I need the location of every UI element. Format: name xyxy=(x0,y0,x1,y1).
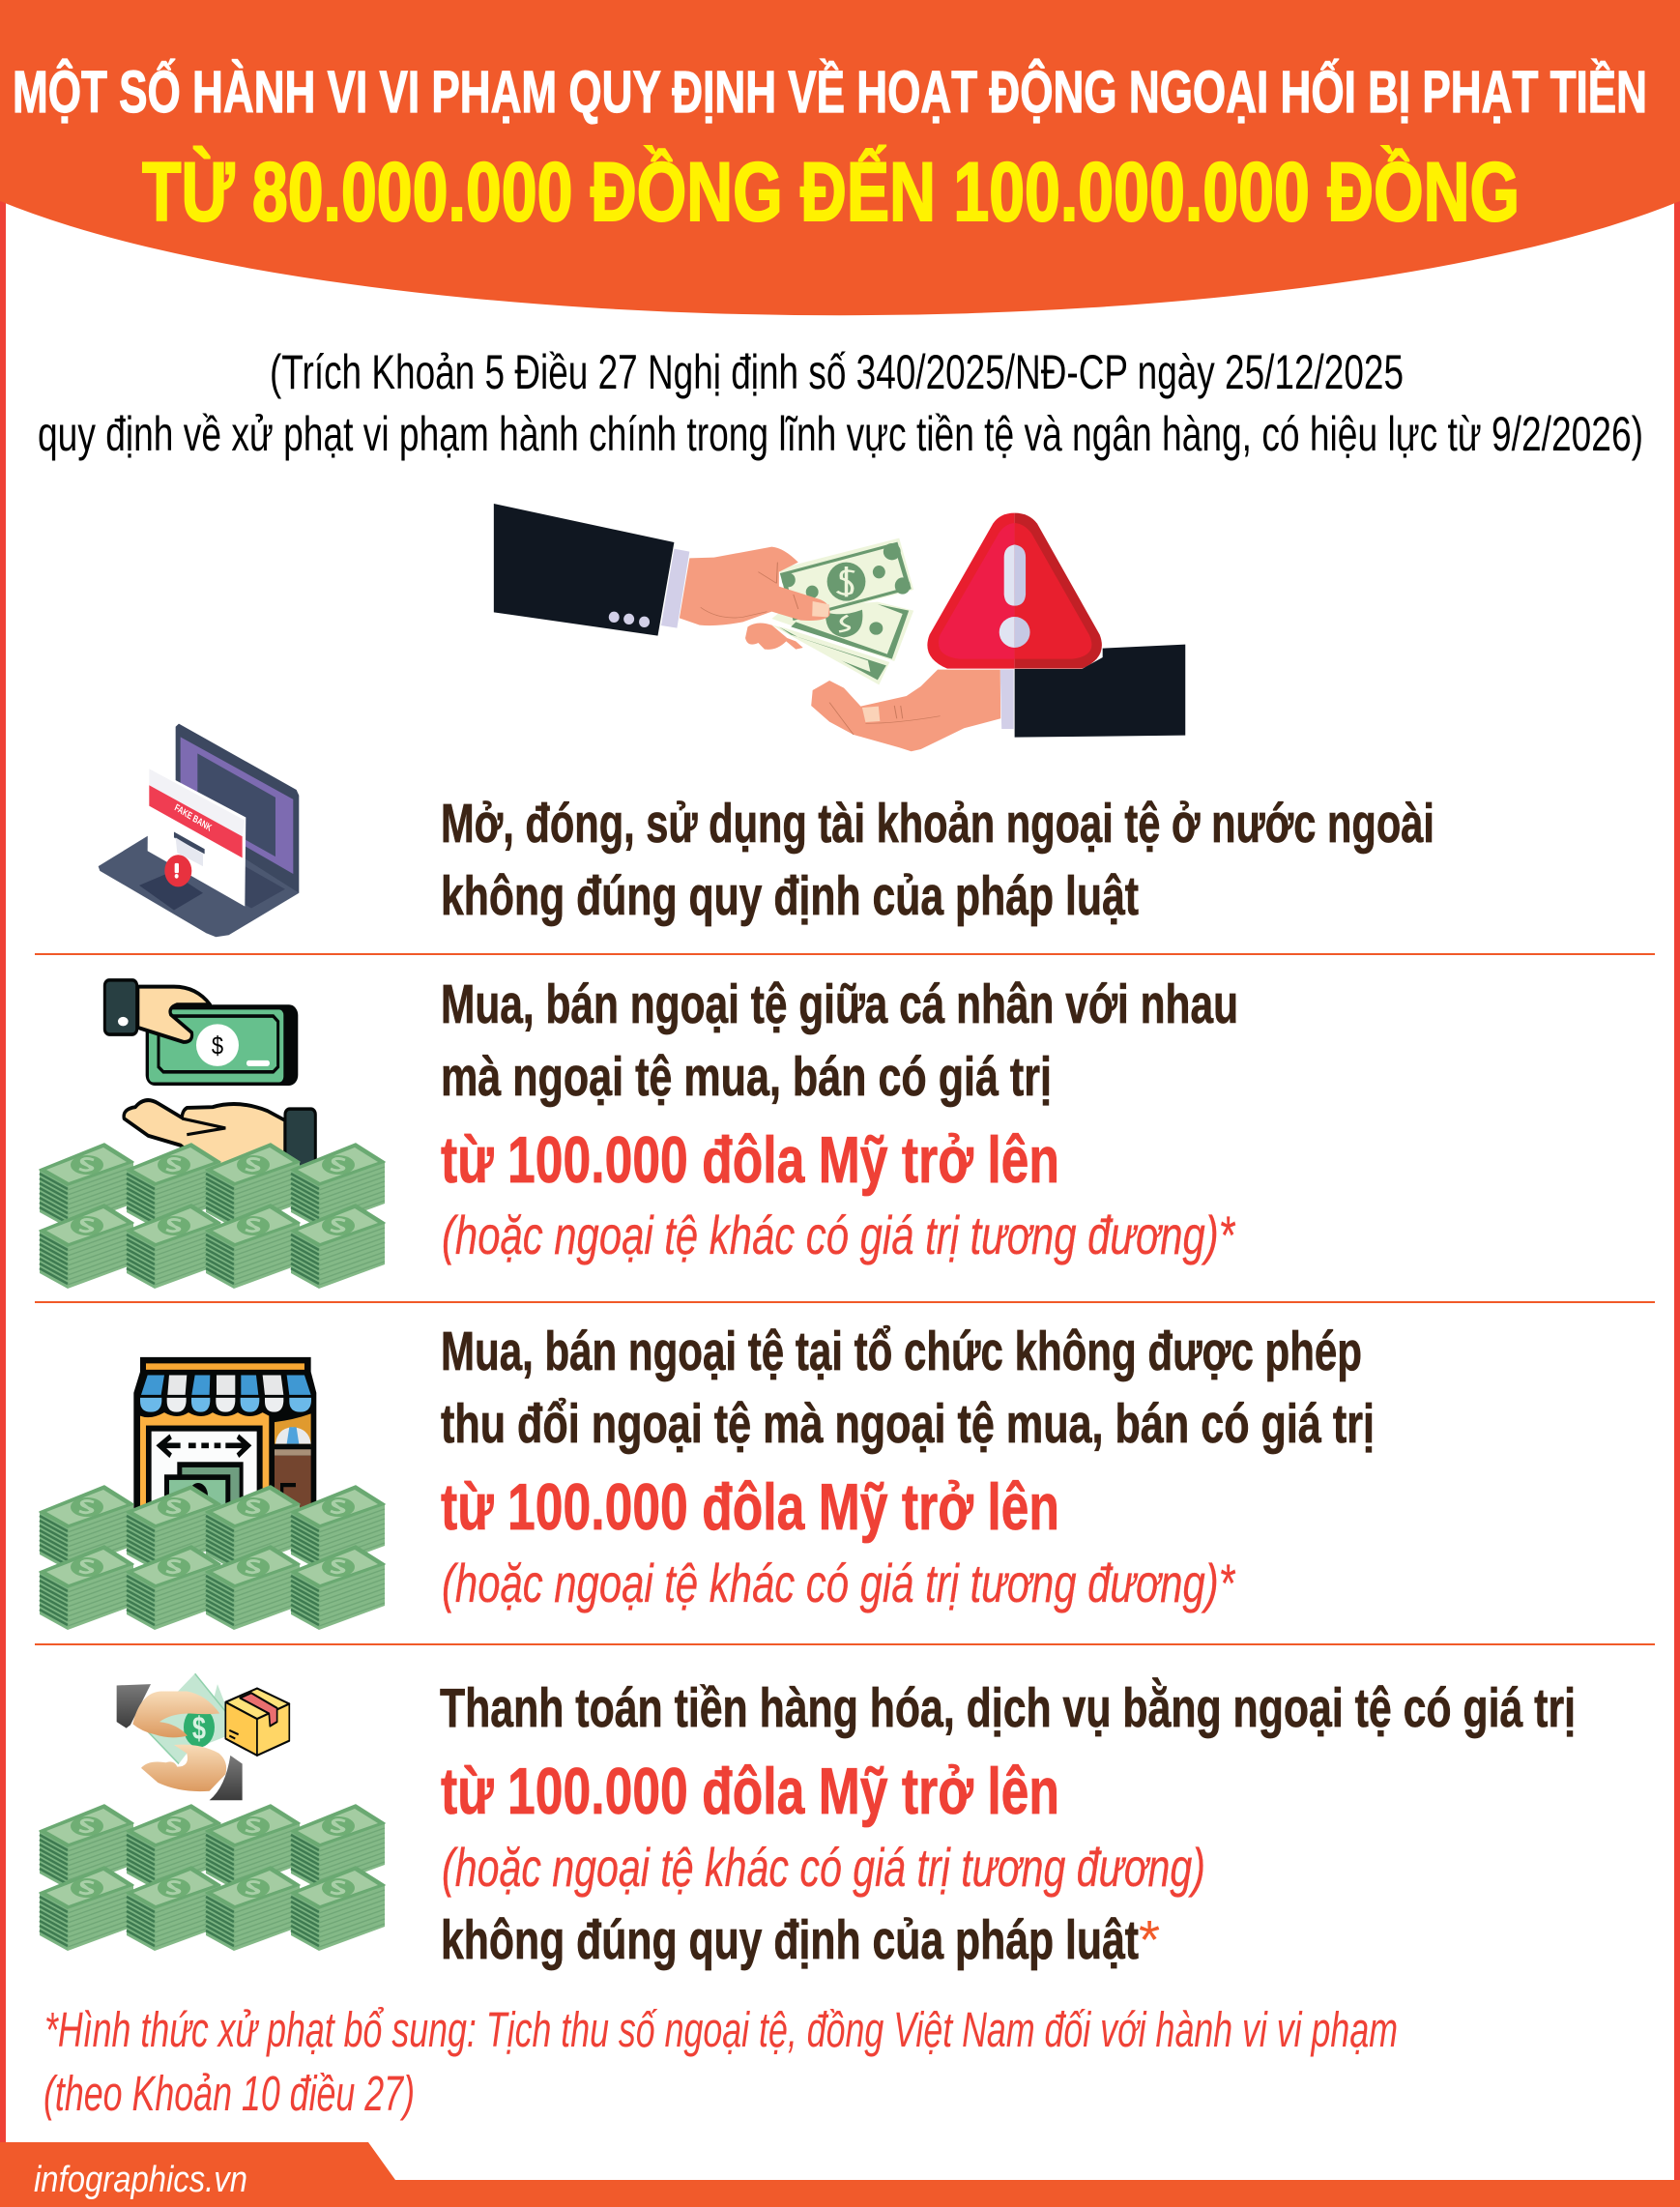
item 2 text: từ 100.000 đôla Mỹ trở lên xyxy=(441,1123,1059,1197)
icon: laptop with fake bank page: FAKE BANK xyxy=(173,802,214,834)
subtitle: legal source xyxy=(38,345,1643,461)
item 4 text: (hoặc ngoại tệ khác có giá trị tương đương) xyxy=(442,1837,1205,1898)
right sleeve xyxy=(1000,645,1185,738)
left hand xyxy=(680,547,830,650)
icon: exchange shop xyxy=(133,1357,316,1514)
item 2 text: Mua, bán ngoại tệ giữa cá nhân với nhau xyxy=(441,973,1238,1035)
item 3 text: (hoặc ngoại tệ khác có giá trị tương đương)* xyxy=(442,1553,1236,1613)
icon: hands exchanging cash with parcel xyxy=(117,1673,289,1800)
item 1 text xyxy=(441,793,1434,927)
item 4 text xyxy=(440,1676,1576,1971)
right hand xyxy=(811,670,1000,751)
item 4 text: không đúng quy định của pháp luật xyxy=(441,1909,1139,1971)
lower hand xyxy=(124,1100,315,1172)
footnote: (theo Khoản 10 điều 27) xyxy=(43,2066,415,2121)
icon: hands passing a banknote xyxy=(104,980,315,1172)
lower sleeve and hand xyxy=(141,1745,243,1800)
icon: money stacks xyxy=(40,1486,385,1630)
item 3 text: Mua, bán ngoại tệ tại tổ chức không được phép xyxy=(441,1321,1362,1382)
double arrow xyxy=(159,1437,248,1456)
footnote xyxy=(43,2002,1398,2121)
notes: $ xyxy=(192,1711,206,1747)
item 2 text: (hoặc ngoại tệ khác có giá trị tương đương)* xyxy=(442,1205,1236,1265)
illustration: hands exchanging money with warning sign xyxy=(494,504,1185,751)
item 1 text: không đúng quy định của pháp luật xyxy=(441,865,1139,927)
upper hand xyxy=(104,980,210,1042)
divider xyxy=(35,1643,1655,1645)
banknote: $ xyxy=(212,1032,224,1060)
awning xyxy=(140,1376,311,1412)
item 3 text: thu đổi ngoại tệ mà ngoại tệ mua, bán có giá trị xyxy=(441,1393,1375,1455)
banknote xyxy=(146,1004,298,1086)
icon: laptop with fake bank page xyxy=(99,724,299,937)
item 3 text xyxy=(441,1321,1375,1613)
icon: money stacks xyxy=(40,1805,385,1951)
item 4 text: từ 100.000 đôla Mỹ trở lên xyxy=(441,1755,1059,1828)
warning triangle xyxy=(927,513,1102,669)
item 2 text xyxy=(441,973,1238,1265)
money notes xyxy=(771,538,913,684)
left sleeve xyxy=(494,504,689,636)
notes xyxy=(147,1673,227,1764)
upper sleeve and hand xyxy=(117,1684,219,1737)
divider xyxy=(35,1301,1655,1303)
side door xyxy=(275,1413,311,1514)
source label: infographics.vn xyxy=(34,2160,247,2200)
divider xyxy=(35,953,1655,955)
icon: money stacks xyxy=(40,1144,385,1289)
item 3 text: từ 100.000 đôla Mỹ trở lên xyxy=(441,1470,1059,1544)
item 4 text: * xyxy=(1139,1909,1160,1971)
footer bar xyxy=(0,2142,1680,2207)
parcel box xyxy=(225,1688,289,1756)
item 2 text: mà ngoại tệ mua, bán có giá trị xyxy=(441,1046,1052,1108)
